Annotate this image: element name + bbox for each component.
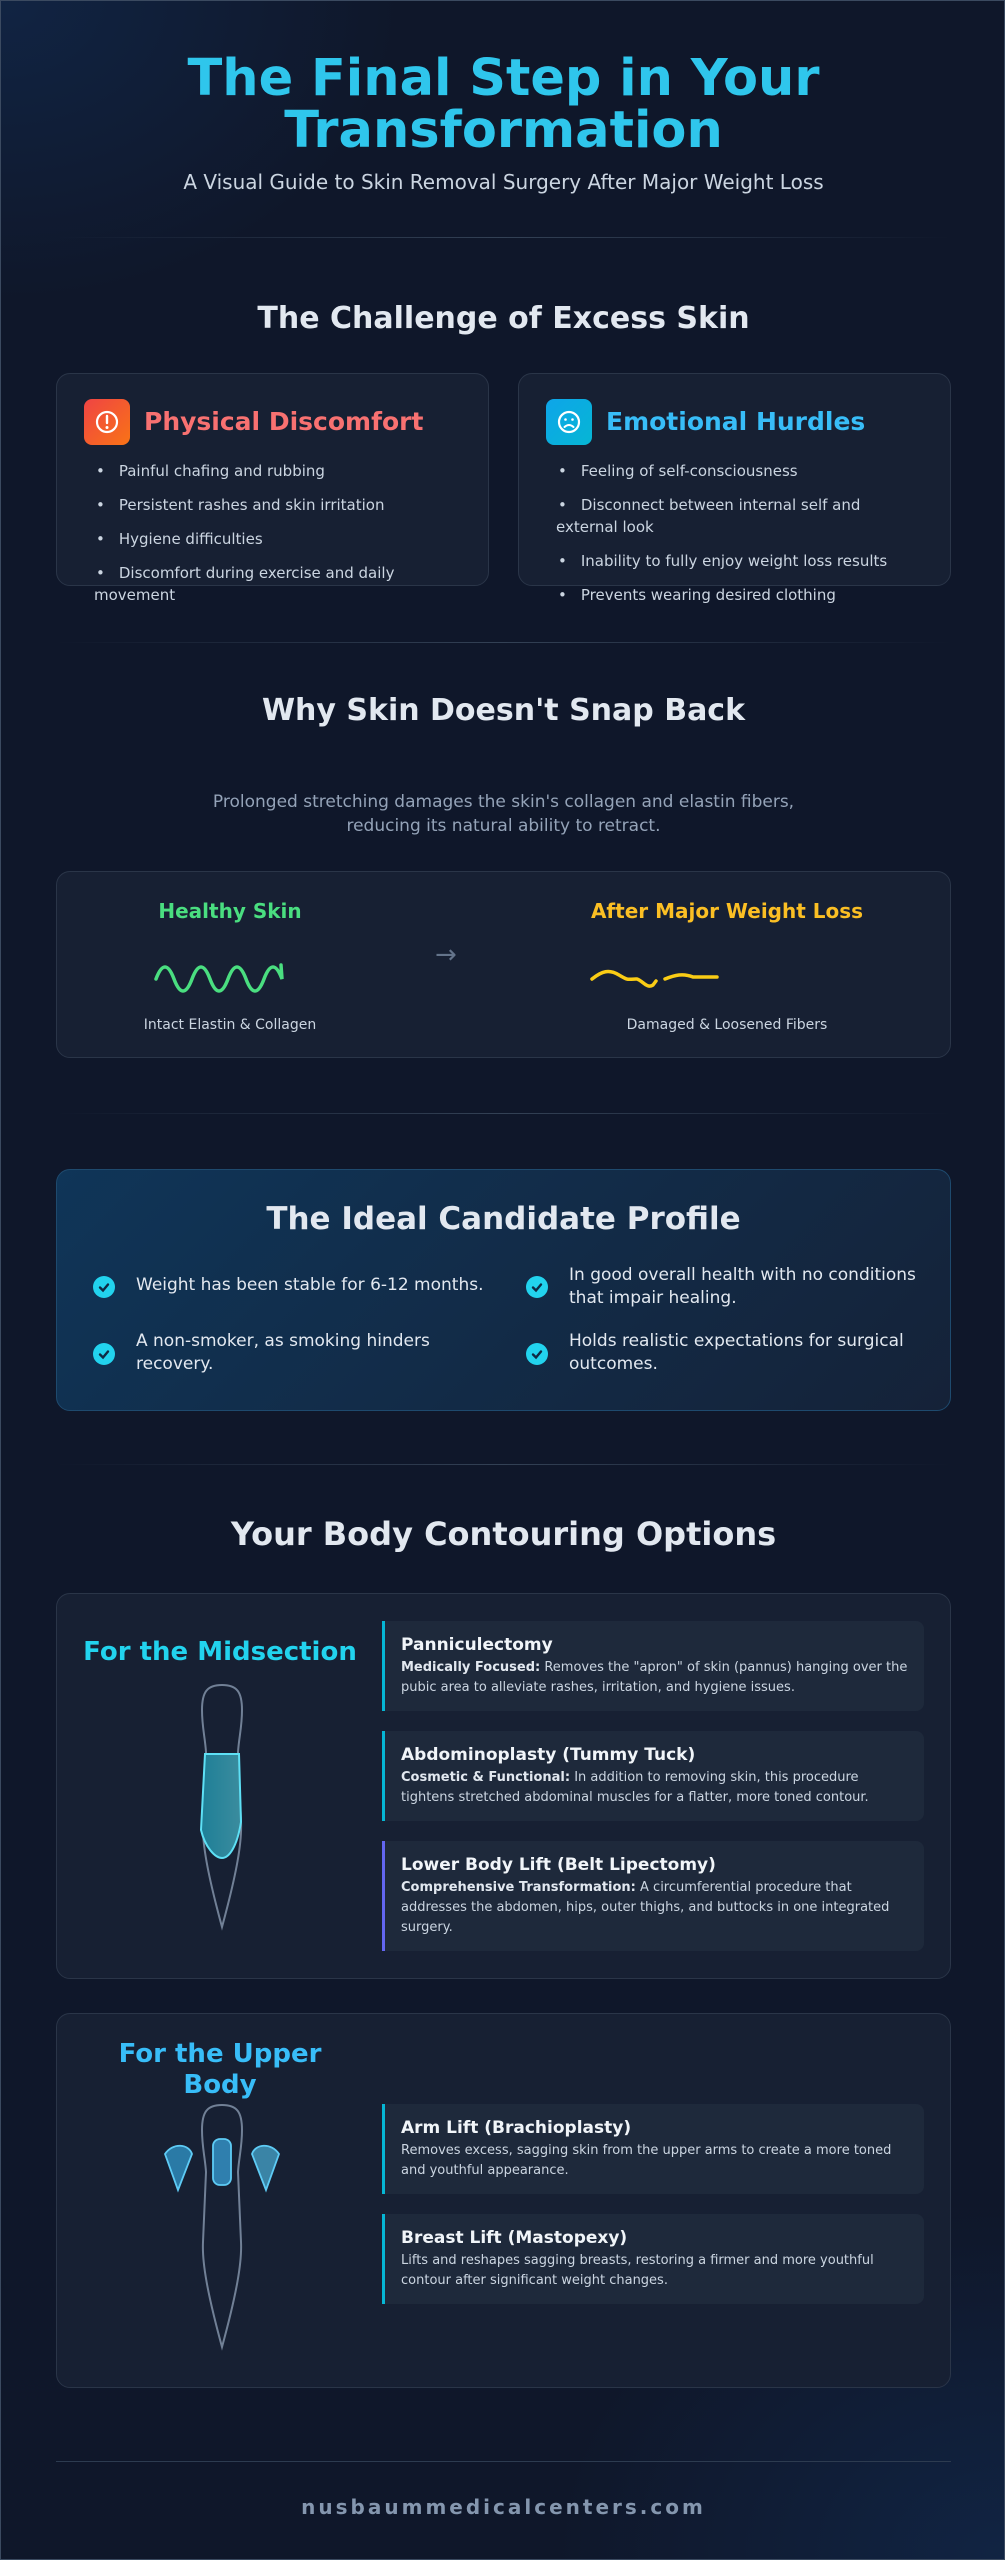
card: arm lift: [382, 2104, 924, 2194]
panel: emotional hurdles: [518, 373, 951, 586]
icon: damaged wave: [590, 970, 719, 988]
item: non-smoker: A non-smoker, as smoking hinders recovery.: [136, 1331, 430, 1374]
heading: emotional: Emotional Hurdles: [606, 407, 865, 436]
heading: midsection: For the Midsection: [83, 1637, 357, 1667]
card: abdominoplasty: Cosmetic & Functional: In addition to removing skin, this procedure tightens stretched abdominal muscles for a flatter, more toned contour.: [401, 1770, 869, 1805]
after weight loss: After Major Weight Loss: [591, 899, 863, 923]
icon: healthy wave: [154, 963, 284, 993]
icon: midsection body: [200, 1684, 243, 1930]
panel: upper body: [56, 2013, 951, 2388]
card: arm lift: Removes excess, sagging skin from the upper arms to create a more toned and youthful appearance.: [401, 2143, 891, 2178]
heading: options: Your Body Contouring Options: [231, 1515, 776, 1553]
healthy skin: Intact Elastin & Collagen: [144, 1017, 316, 1033]
list: emotional: Feeling of self-consciousness: [581, 462, 798, 480]
card: lower body lift: [382, 1841, 924, 1951]
arrow: →: [435, 940, 457, 970]
heading: why skin: Why Skin Doesn't Snap Back: [262, 693, 745, 728]
subtitle: A Visual Guide to Skin Removal Surgery After Major Weight Loss: [183, 170, 824, 194]
item: realistic expectations: Holds realistic expectations for surgical outcomes.: [569, 1331, 904, 1374]
text: why explanation: reducing its natural ability to retract.: [346, 816, 661, 836]
title: The Final Step in Your: [188, 49, 819, 108]
heading: physical: Physical Discomfort: [144, 407, 423, 436]
healthy skin: [144, 899, 316, 1033]
text: why explanation: [213, 792, 794, 836]
icon: upper body: [164, 2104, 280, 2350]
list: emotional: Disconnect between internal self and external look: [556, 496, 860, 536]
footer: nusbaummedicalcenters.com: [301, 2495, 706, 2519]
list: emotional: [556, 462, 887, 604]
card: breast lift: Lifts and reshapes sagging breasts, restoring a firmer and more youthful contour after significant weight changes.: [401, 2253, 874, 2288]
item: good health: In good overall health with no conditions that impair healing.: [569, 1265, 916, 1308]
list: physical: Discomfort during exercise and daily movement: [94, 564, 394, 604]
after weight loss: [590, 899, 863, 1033]
item: stable weight: Weight has been stable for 6-12 months.: [136, 1275, 484, 1295]
card: lower body lift: Comprehensive Transformation: A circumferential procedure that addresses the abdomen, hips, outer thighs, and buttocks in one integrated surgery.: [401, 1880, 889, 1935]
icon: sad face: [546, 399, 592, 445]
list: emotional: Inability to fully enjoy weight loss results: [581, 552, 887, 570]
title: Transformation: [284, 101, 723, 160]
heading: upper body: Body: [183, 2070, 257, 2100]
card: panniculectomy: Panniculectomy: [401, 1635, 553, 1655]
heading: challenge: The Challenge of Excess Skin: [257, 301, 750, 336]
panel: physical discomfort: [56, 373, 489, 586]
list: physical: Hygiene difficulties: [119, 530, 263, 548]
text: why explanation: Prolonged stretching damages the skin's collagen and elastin fibers,: [213, 792, 794, 812]
heading: upper body: For the Upper: [119, 2039, 321, 2069]
panel: ideal candidate: [56, 1169, 951, 1411]
card: arm lift: Arm Lift (Brachioplasty): [401, 2118, 631, 2138]
heading: upper body: [119, 2039, 322, 2100]
icon: alert: [84, 399, 130, 445]
card: breast lift: [382, 2214, 924, 2304]
card: lower body lift: Lower Body Lift (Belt Lipectomy): [401, 1855, 716, 1875]
card: panniculectomy: [382, 1621, 924, 1711]
title: [188, 49, 820, 160]
after weight loss: Damaged & Loosened Fibers: [627, 1017, 827, 1033]
card: abdominoplasty: [382, 1731, 924, 1821]
list: physical: Painful chafing and rubbing: [119, 462, 325, 480]
card: panniculectomy: Medically Focused: Removes the "apron" of skin (pannus) hanging over the pubic area to alleviate rashes, irritation, and hygiene issues.: [401, 1660, 907, 1695]
list: emotional: Prevents wearing desired clothing: [581, 586, 836, 604]
list: physical: Persistent rashes and skin irritation: [119, 496, 384, 514]
panel: skin comparison: [56, 871, 951, 1058]
heading: candidate: The Ideal Candidate Profile: [266, 1201, 741, 1237]
list: physical: [94, 462, 394, 604]
card: abdominoplasty: Abdominoplasty (Tummy Tuck): [401, 1745, 695, 1765]
healthy skin: Healthy Skin: [158, 899, 302, 923]
card: breast lift: Breast Lift (Mastopexy): [401, 2228, 627, 2248]
panel: midsection: [56, 1593, 951, 1979]
